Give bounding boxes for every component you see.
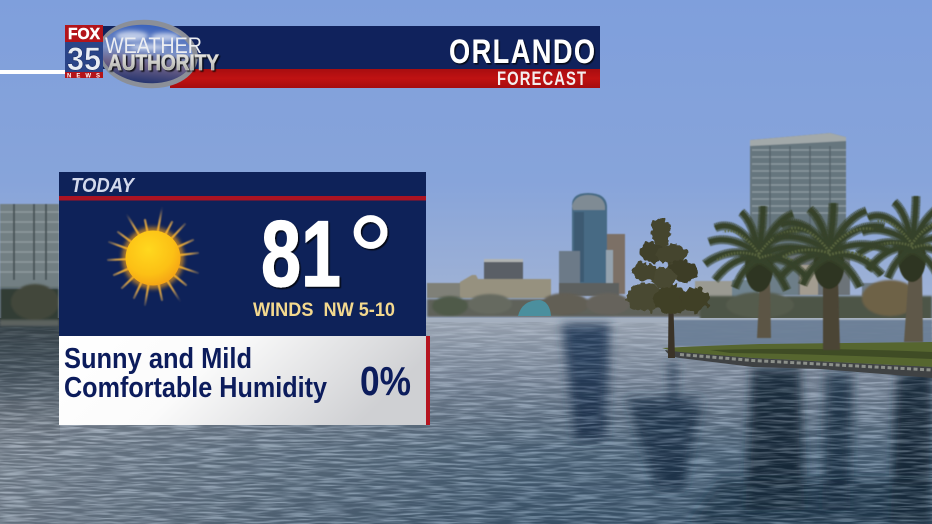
logo wordmark weather: WEATHER	[105, 33, 202, 58]
conditions line two: Comfortable Humidity	[64, 372, 327, 404]
logo and header bar	[65, 15, 600, 93]
logo FOX block: FOX	[68, 26, 100, 43]
upper lake behind the island	[672, 320, 932, 346]
header navy band	[100, 26, 600, 69]
shoreline trees	[427, 280, 932, 320]
white accent line	[0, 70, 66, 74]
conditions line one: Sunny and Mild	[64, 343, 252, 375]
left shore building	[0, 204, 59, 288]
water base	[0, 318, 932, 524]
location heading: ORLANDO	[449, 32, 596, 71]
red edge	[426, 336, 430, 425]
sky background	[0, 0, 932, 330]
winds: WINDS NW 5-10	[253, 299, 395, 321]
low buildings behind palms	[695, 280, 890, 299]
today label: TODAY	[71, 175, 136, 197]
conditions background	[59, 336, 426, 425]
header red band	[170, 69, 600, 88]
palm tree three	[858, 196, 932, 342]
logo NEWS block: NEWS	[67, 74, 100, 80]
island lawn and stone wall	[662, 342, 932, 378]
water ripples	[0, 322, 932, 524]
logo NEWS block	[65, 72, 103, 80]
panel navy background	[59, 172, 426, 336]
palm tree one	[705, 206, 813, 338]
palm tree two	[770, 203, 888, 350]
precipitation chance: 0%	[360, 358, 411, 404]
water reflections	[562, 324, 932, 524]
icon: sun	[108, 208, 198, 305]
distant skyline tower and buildings	[427, 193, 625, 298]
water light area on left	[0, 400, 540, 524]
left water	[0, 318, 60, 524]
forecast subheading: FORECAST	[497, 68, 587, 89]
left shore trees	[0, 284, 59, 326]
panel: conditions	[59, 336, 430, 425]
dome	[518, 300, 551, 316]
degree symbol: °	[347, 192, 394, 324]
temperature: 81	[261, 201, 341, 306]
tall tower on right	[750, 133, 850, 295]
panel: today forecast	[59, 172, 426, 336]
logo wordmark authority: AUTHORITY	[108, 50, 219, 75]
logo oval	[95, 15, 201, 93]
logo 35 block: 35	[67, 41, 101, 77]
small tree	[627, 218, 709, 358]
red divider	[59, 196, 426, 200]
